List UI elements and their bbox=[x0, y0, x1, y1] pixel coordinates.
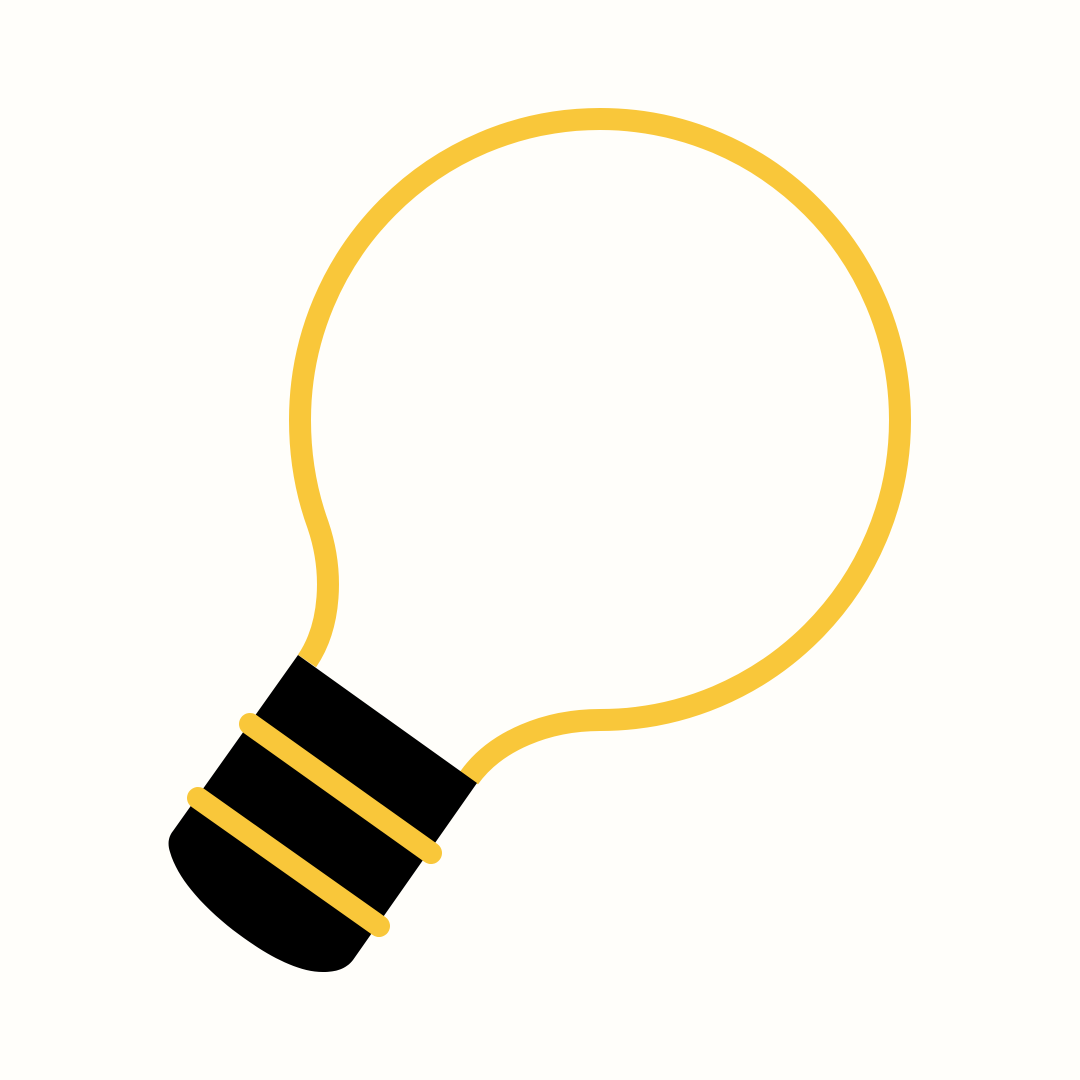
base stripe upper bbox=[250, 724, 431, 853]
bulb glass outline bbox=[300, 119, 900, 778]
bulb base bbox=[169, 655, 477, 972]
base stripe lower bbox=[198, 798, 379, 926]
